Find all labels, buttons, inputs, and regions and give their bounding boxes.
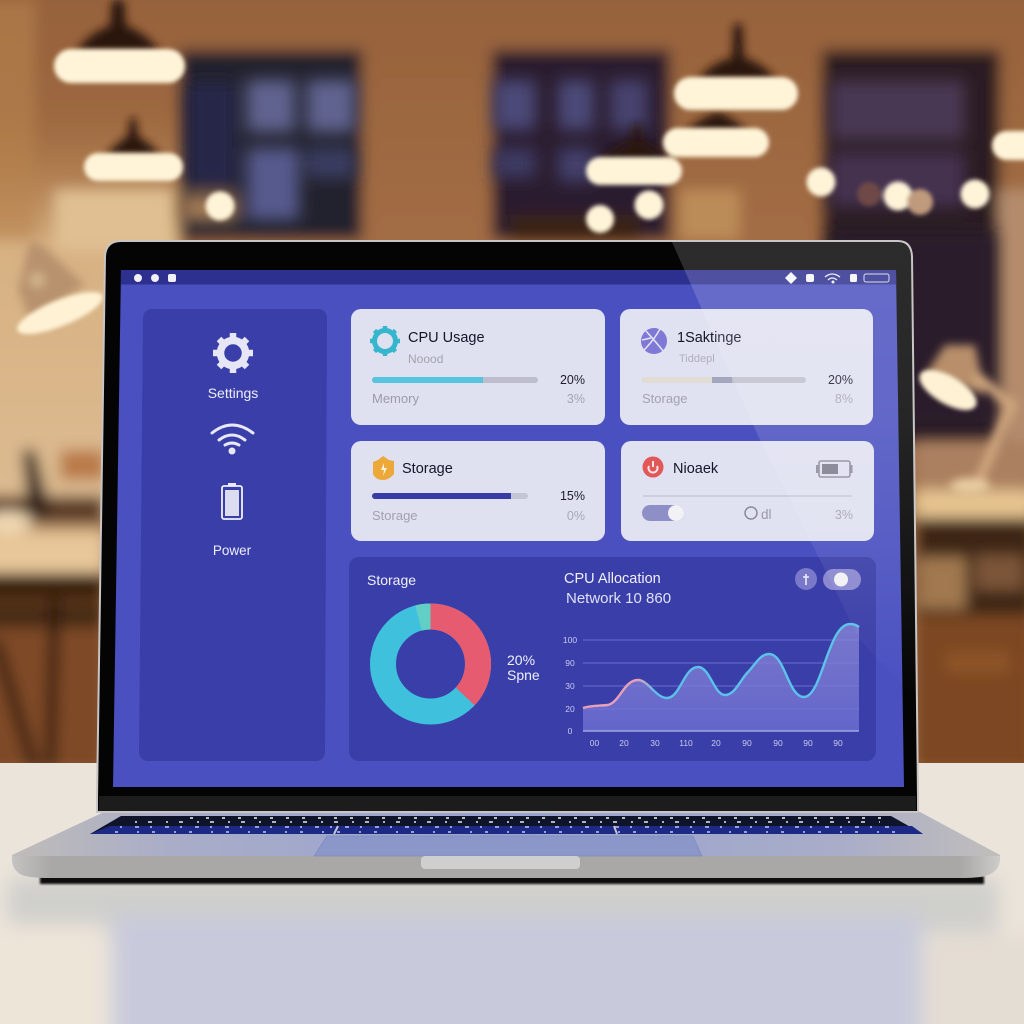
donut label (507, 652, 540, 683)
card: settings: Tiddepl (679, 353, 715, 365)
line chart: 30 (565, 681, 575, 691)
card: storage: Storage (372, 508, 418, 523)
line chart: 90 (742, 738, 752, 748)
panel: analytics (349, 557, 876, 761)
card: CPU usage: Memory (372, 391, 419, 406)
donut chart (383, 616, 478, 712)
card: storage: 0% (567, 509, 585, 523)
card: settings: 1Saktinge (677, 330, 742, 346)
bright column (680, 190, 740, 240)
icon: settings gear (213, 333, 253, 373)
label: power: Power (213, 543, 252, 558)
icon: wifi (212, 425, 253, 454)
line chart: 90 (833, 738, 843, 748)
subheading: network: Network 10 860 (566, 590, 671, 607)
line chart: 20 (619, 738, 629, 748)
card: settings (620, 309, 873, 425)
card: CPU usage: CPU Usage (408, 330, 485, 346)
card: settings: Storage (642, 391, 688, 406)
toggle switch (642, 505, 684, 521)
line chart: 30 (650, 738, 660, 748)
card: CPU usage (351, 309, 605, 425)
line chart: 00 (590, 738, 599, 748)
donut label: Spne (507, 667, 540, 683)
line chart: 90 (803, 738, 813, 748)
line (583, 624, 859, 708)
laptop (12, 241, 1000, 884)
icon: cyan gear (370, 326, 400, 356)
blurred cafe background (0, 0, 1024, 800)
area (583, 624, 859, 731)
screen glare (672, 242, 917, 700)
progress bar (372, 493, 528, 499)
pendant lamps and bokeh lights (54, 0, 1024, 233)
card: settings: 8% (835, 392, 853, 406)
toggle button (823, 569, 861, 590)
line chart: 20 (711, 738, 721, 748)
window left (180, 50, 362, 240)
icon: orange badge (373, 456, 394, 480)
desk surface (0, 763, 1024, 1024)
laptop shadow (40, 876, 984, 884)
menu bar (121, 270, 896, 284)
window right (822, 50, 1000, 444)
panel: sidebar (139, 309, 327, 761)
card: storage: 15% (560, 489, 585, 503)
info button (795, 568, 817, 590)
line chart: 90 (773, 738, 783, 748)
icon: battery (222, 483, 242, 519)
left furniture (0, 500, 105, 534)
laptop base deck (12, 812, 1000, 858)
heading: storage: Storage (367, 572, 416, 588)
card: CPU usage: Noood (408, 352, 443, 366)
icon: battery outline (816, 461, 852, 477)
card: network: 3% (835, 508, 853, 522)
line chart: 90 (565, 658, 575, 668)
screen display (113, 270, 904, 787)
trackpad (314, 836, 702, 856)
opening notch (421, 856, 580, 869)
line chart: 20 (565, 704, 575, 714)
icon: red power (642, 456, 664, 478)
keyboard (90, 816, 923, 834)
left wall glow (0, 100, 180, 520)
heading: CPU allocation: CPU Allocation (564, 571, 661, 587)
right furniture (915, 440, 1024, 492)
screen lid (97, 241, 918, 812)
laptop front edge (12, 856, 1000, 878)
card: network: dl (761, 507, 772, 522)
window panes (182, 80, 995, 430)
card: storage: Storage (402, 461, 453, 477)
card: storage (351, 441, 605, 541)
progress bar (372, 377, 538, 383)
line chart (563, 624, 859, 748)
window center (492, 50, 670, 240)
donut label: 20% (507, 652, 535, 668)
icon: purple ball (641, 328, 667, 354)
line chart: 110 (679, 738, 693, 748)
card: network (621, 441, 874, 541)
card: CPU usage: 20% (560, 373, 585, 387)
line chart: 0 (568, 726, 573, 736)
card: network: Nioaek (673, 461, 719, 477)
desk lamps (12, 240, 1012, 494)
card: CPU usage: 3% (567, 392, 585, 406)
label: settings: Settings (208, 385, 258, 401)
progress bar (642, 377, 806, 383)
card: settings: 20% (828, 373, 853, 387)
line chart: 100 (563, 635, 577, 645)
